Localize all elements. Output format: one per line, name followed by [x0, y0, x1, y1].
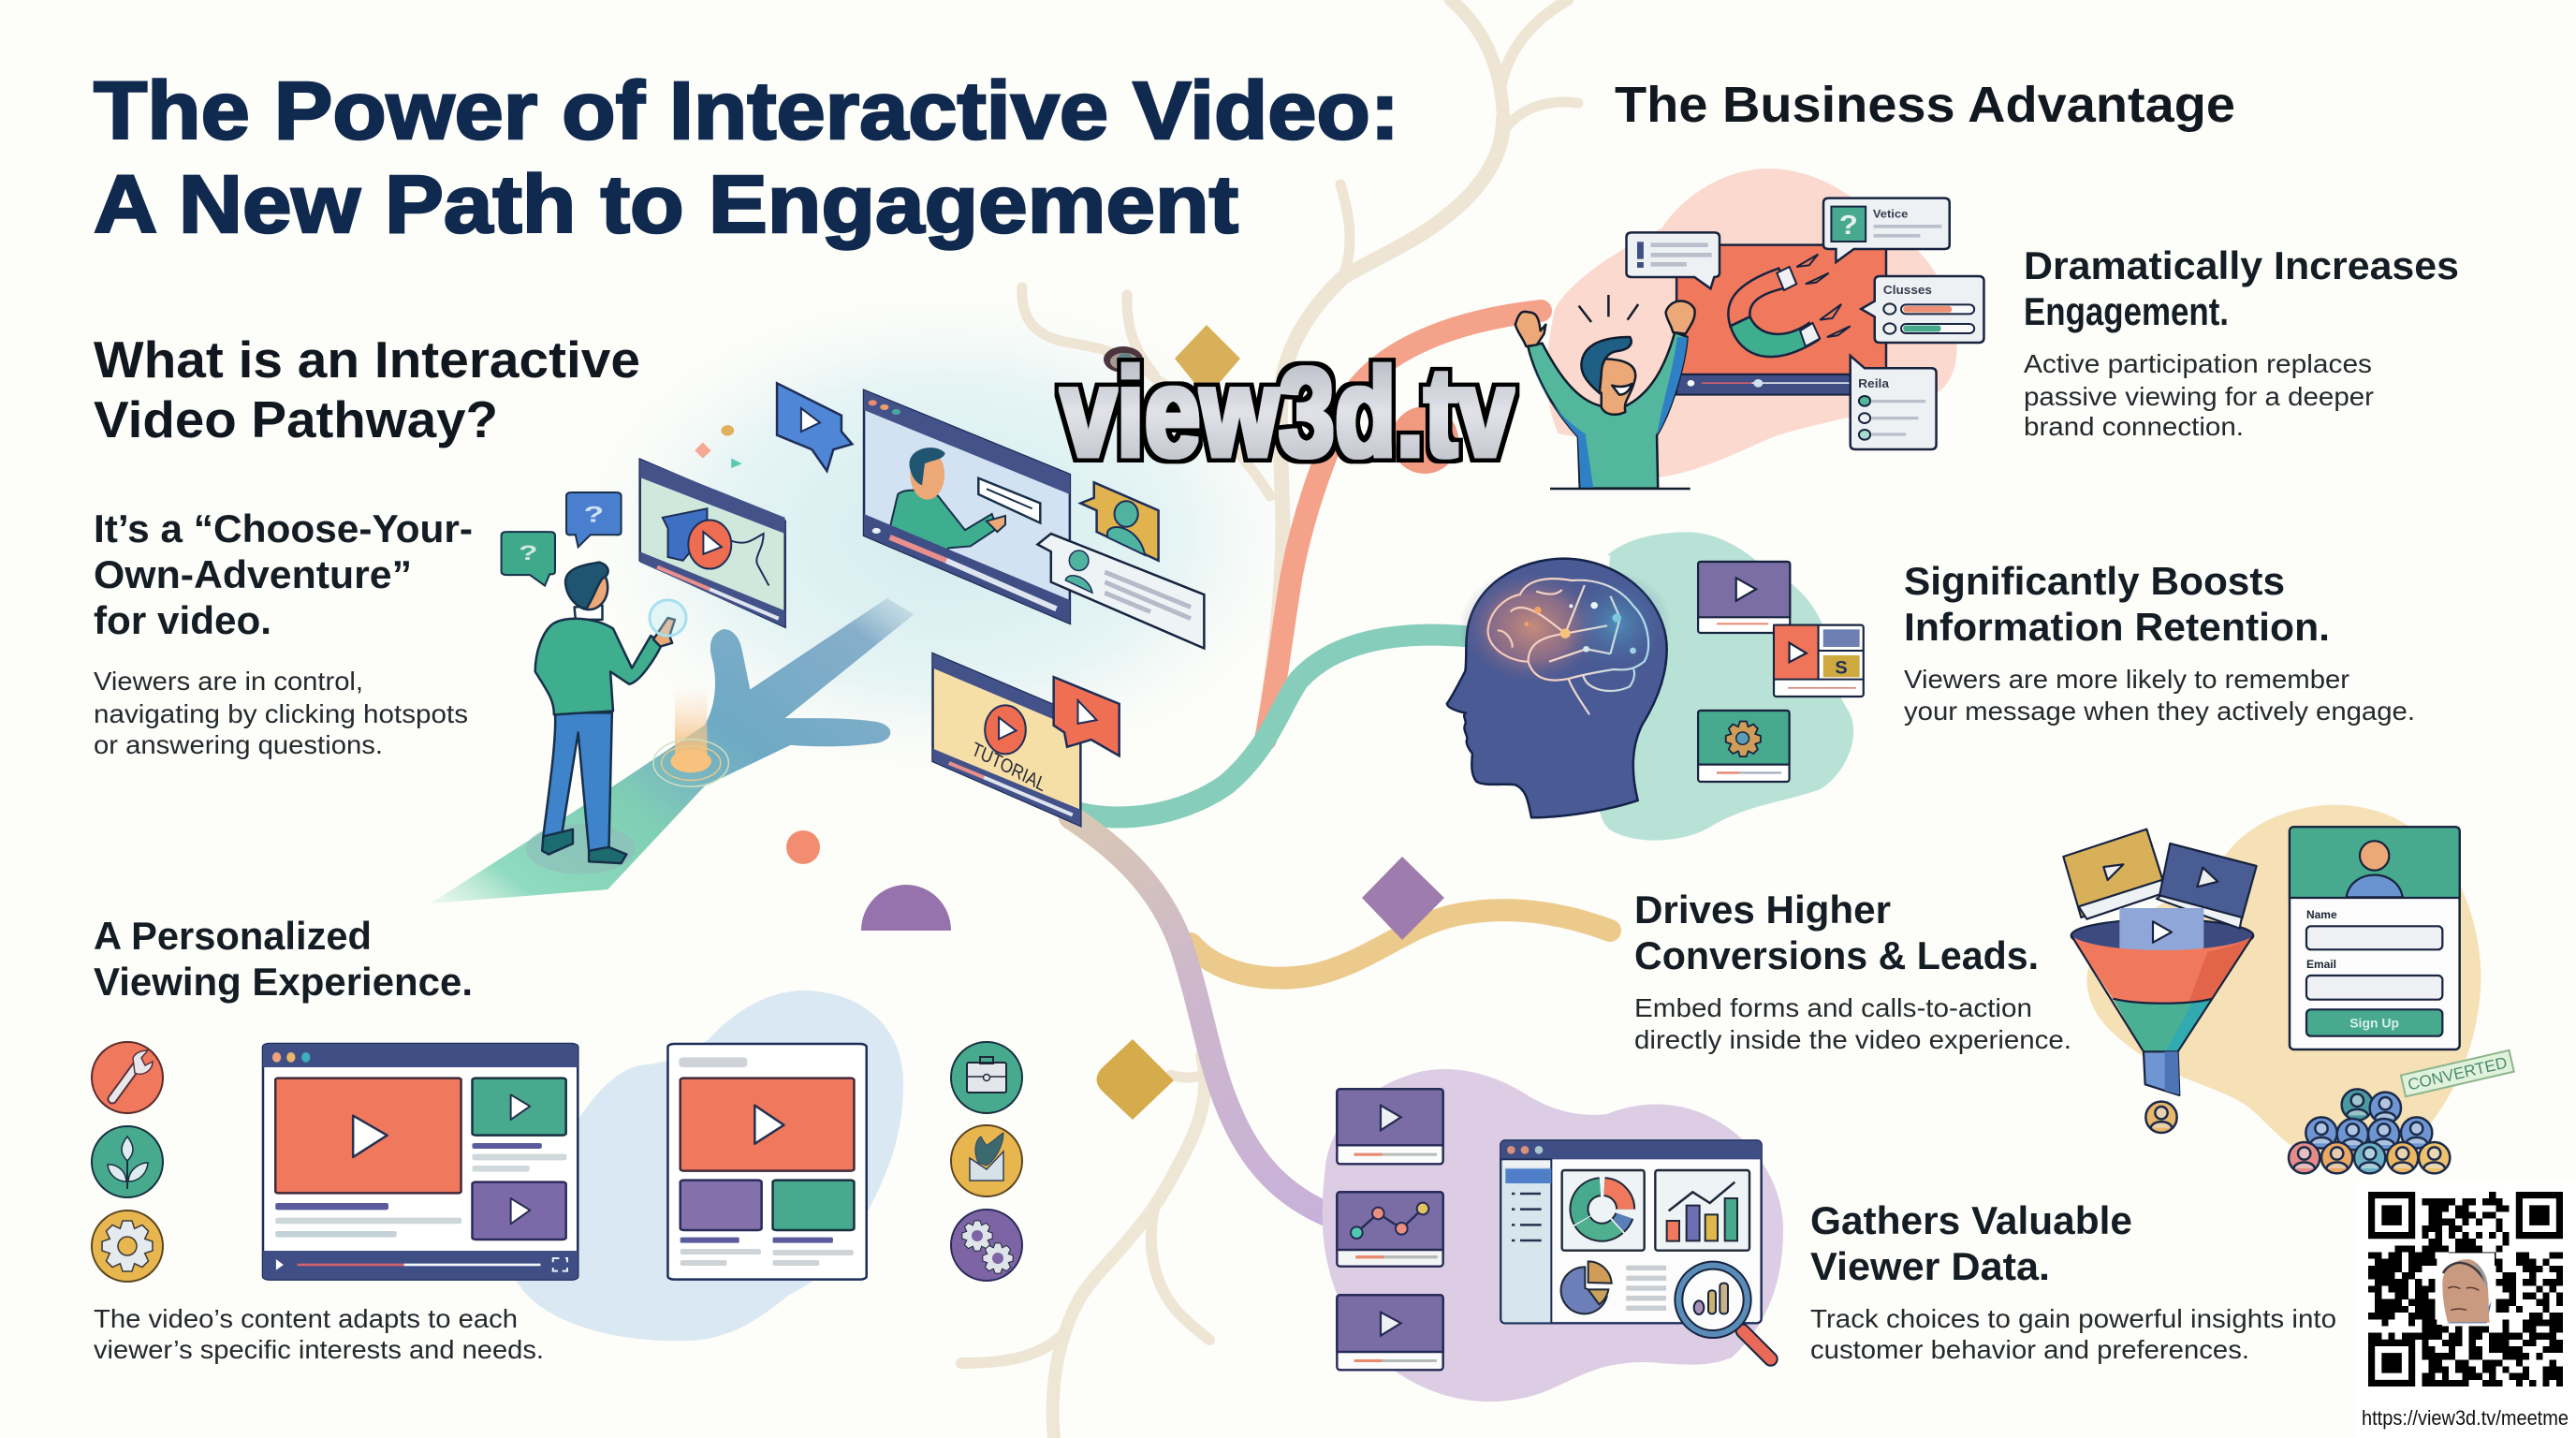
text block: viewer data: customer behavior and preferences. — [1810, 1335, 2249, 1364]
pink blob — [1546, 169, 1957, 477]
text block: retention: Viewers are more likely to remember — [1904, 665, 2349, 694]
magnifying glass — [1678, 1266, 1771, 1359]
converted stamp: CONVERTED — [2406, 1053, 2509, 1094]
signup form — [2290, 827, 2460, 1049]
text block: viewer data: Gathers Valuable — [1810, 1198, 2132, 1242]
text block: engagement: Dramatically Increases — [2024, 243, 2459, 287]
personalized windows — [263, 1044, 867, 1280]
signup form: Sign Up — [2349, 1016, 2399, 1031]
person — [535, 563, 675, 863]
heading: what is an interactive video pathway: Video Pathway? — [94, 390, 498, 448]
heading: what is an interactive video pathway: What is an Interactive — [94, 330, 640, 389]
red play bubble — [1054, 677, 1120, 756]
desktop window — [263, 1044, 578, 1280]
text block: conversions: Embed forms and calls-to-action — [1634, 993, 2032, 1022]
bubble: notes — [1627, 232, 1720, 288]
topic icon: feather envelope — [951, 1125, 1022, 1196]
decorative diamonds and dots — [786, 325, 1444, 1120]
topic icon: wrench — [92, 1042, 163, 1113]
text block: conversions — [1634, 888, 2071, 1054]
coloured path: teal to retention — [1058, 635, 1470, 817]
bubble: question: Vetice — [1873, 207, 1908, 220]
head with glowing brain — [1447, 559, 1672, 817]
text block: viewer data — [1810, 1198, 2336, 1364]
topic icon: plant — [92, 1126, 163, 1197]
video card: graduation — [640, 460, 785, 627]
hotspot beam — [653, 686, 728, 786]
bubble: options — [1851, 356, 1937, 449]
portrait in qr — [2437, 1253, 2495, 1325]
signup form: Name — [2306, 908, 2337, 921]
text block: retention — [1904, 559, 2415, 726]
text block: choose your own adventure: for video. — [94, 598, 271, 642]
mini video: split screen: S — [1835, 658, 1848, 678]
text block: engagement: passive viewing for a deeper — [2024, 382, 2374, 411]
video screen with magnet — [1676, 245, 1886, 395]
gold profile bubble — [1080, 482, 1159, 561]
coloured path: salmon to engagement — [1266, 311, 1541, 740]
floor shadow — [526, 824, 636, 874]
text block: personalized description: viewer’s specific interests and needs. — [94, 1335, 544, 1364]
branching path band — [431, 598, 914, 903]
purple blob — [1323, 1069, 1783, 1401]
text block: conversions: Drives Higher — [1634, 888, 1891, 932]
bubble: poll — [1861, 276, 1983, 343]
light blue blob behind personalized windows — [516, 990, 903, 1341]
bubble: options: Reila — [1858, 377, 1889, 390]
heading: what is an interactive video pathway — [94, 330, 640, 448]
question bubble green: ? — [519, 541, 537, 565]
video list chart — [1337, 1192, 1443, 1267]
converted user — [2145, 1102, 2177, 1133]
text block: choose your own adventure: navigating by clicking hotspots — [94, 699, 468, 728]
text block: viewer data: Viewer Data. — [1810, 1244, 2050, 1288]
bubble: question — [1823, 198, 1950, 262]
text block: engagement: brand connection. — [2024, 412, 2244, 441]
excited person — [1515, 295, 1695, 489]
text block: engagement — [2024, 243, 2459, 441]
converted crowd — [2289, 1089, 2450, 1173]
message card — [1037, 534, 1204, 649]
question bubble blue: ? — [583, 503, 604, 527]
text block: retention: Significantly Boosts — [1904, 559, 2285, 603]
bubble: question: ? — [1839, 210, 1858, 240]
text block: conversions: Conversions & Leads. — [1634, 933, 2039, 977]
touch ripple — [650, 600, 686, 636]
title: The Power of Interactive Video: — [94, 66, 1399, 156]
mini video: gear — [1698, 711, 1790, 782]
text block: personalized heading: Viewing Experience. — [94, 960, 473, 1004]
text block: personalized description: The video’s content adapts to each — [94, 1304, 518, 1333]
heading: the business advantage: The Business Advantage — [1615, 77, 2235, 133]
qr code — [2357, 1181, 2576, 1438]
text block: choose your own adventure: Own-Adventure” — [94, 552, 412, 596]
topic icon: briefcase — [951, 1042, 1022, 1113]
text block: choose your own adventure: or answering questions. — [94, 730, 383, 759]
video list top — [1337, 1089, 1443, 1164]
watermark logo: view3d.tv — [1061, 342, 1514, 483]
text block: viewer data: Track choices to gain powerful insights into — [1810, 1304, 2336, 1333]
text block: personalized heading — [94, 914, 473, 1004]
analytics dashboard — [1500, 1140, 1762, 1323]
tan blob — [2086, 805, 2481, 1157]
blue play bubble — [777, 383, 852, 471]
bubble: poll: Clusses — [1883, 284, 1932, 297]
mini video: play — [1698, 562, 1790, 633]
topic icon: two gears — [951, 1210, 1022, 1281]
text block: retention: Information Retention. — [1904, 605, 2330, 649]
topic icon: gear — [92, 1211, 163, 1282]
illustration: viewer data — [1323, 1069, 1783, 1401]
coloured path: yellow to conversions — [1191, 910, 1610, 978]
text block: choose your own adventure: Viewers are in control, — [94, 667, 363, 696]
text block: choose your own adventure — [94, 506, 473, 759]
teal blob — [1594, 532, 1853, 841]
mini video: split screen — [1774, 625, 1864, 697]
tablet window — [667, 1044, 867, 1280]
illustration: conversions — [2063, 805, 2514, 1173]
text block: engagement: Engagement. — [2024, 289, 2229, 333]
coloured path: mauve to data — [1071, 817, 1339, 1219]
tutorial card: TUTORIAL — [969, 738, 1049, 796]
text block: personalized heading: A Personalized — [94, 914, 372, 958]
beige tree branches — [961, 0, 1578, 1438]
text block: personalized description — [94, 1304, 544, 1364]
small floating shapes — [695, 425, 742, 468]
signup form: Email — [2306, 958, 2336, 971]
question bubble green — [502, 532, 555, 586]
title: A New Path to Engagement — [94, 159, 1238, 250]
tutorial card — [933, 653, 1080, 826]
question bubble blue — [566, 492, 622, 547]
text block: retention: your message when they actively engage. — [1904, 697, 2415, 726]
text block: conversions: directly inside the video experience. — [1634, 1025, 2071, 1054]
text block: engagement: Active participation replaces — [2024, 349, 2372, 378]
eye sticker — [1104, 346, 1143, 373]
video list bottom — [1337, 1295, 1443, 1370]
funnel with videos — [2063, 829, 2257, 1095]
text block: choose your own adventure: It’s a “Choose-Your- — [94, 506, 473, 550]
title — [94, 66, 1399, 250]
illustration: viewer choosing a video path — [431, 383, 1204, 903]
illustration: retention — [1447, 532, 1864, 841]
glow behind floating video screens — [552, 276, 1339, 791]
video card: presenter — [864, 390, 1070, 624]
illustration: engagement — [1515, 169, 1983, 489]
